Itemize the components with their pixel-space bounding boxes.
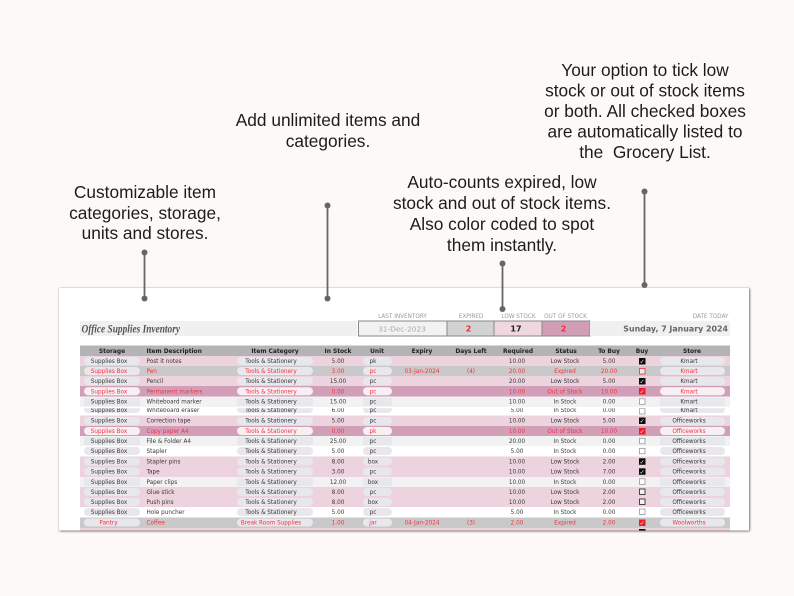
row: Whiteboard marker [80,396,730,407]
row: Whiteboard eraser: Whiteboard eraser [146,408,200,414]
row: Pencil: Pencil [146,379,164,385]
note: unlimited items: categories. [286,131,370,151]
row: Push pins: 10.00 [509,500,526,506]
note: tick options: the Grocery List. [579,142,711,162]
row: Stapler pins: Officeworks [672,460,706,466]
row: Tape: Low Stock [551,470,580,476]
row: Tape: pc [370,470,376,476]
note: auto-counts: them instantly. [447,235,557,255]
row: Coffee: Coffee [146,521,165,527]
row: Stapler: 0.00 [603,449,616,455]
row: Glue stick: Supplies Box [91,490,128,496]
row: Post it notes: Low Stock [551,359,580,365]
row: Hole puncher: 0.00 [603,510,616,516]
row: Stapler pins: box [368,460,379,466]
row: File & Folder A4: pc [370,439,376,445]
row: Tape: Tools & Stationery [244,470,297,476]
summary counters: LOW STOCK [501,314,536,320]
row: Pen: 20.00 [509,369,526,375]
row: Paper clips: Supplies Box [91,480,128,486]
row: Glue stick: Tools & Stationery [244,490,297,496]
row: Whiteboard marker: Kmart [680,400,698,406]
row: Stapler pins: 2.00 [603,460,616,466]
row: Stapler pins: Stapler pins [146,460,180,466]
row: Hole puncher: 5.00 [332,510,345,516]
row: Pencil: Kmart [680,379,698,385]
row: Permanent markers [80,386,730,396]
row: Hole puncher: pc [370,510,376,516]
row: Post it notes: pk [370,359,377,365]
row: Copy paper A4: Tools & Stationery [244,429,297,435]
table header: Storage [99,349,125,355]
row: Paper clips: Tools & Stationery [244,480,297,486]
row: Glue stick: 10.00 [509,490,526,496]
row: File & Folder A4: 0.00 [603,439,616,445]
row: Whiteboard eraser: In Stock [554,408,577,414]
table header [80,346,730,356]
row: Stapler: 5.00 [332,449,345,455]
row: Push pins: box [368,500,379,506]
row: Push pins: Officeworks [672,500,706,506]
row: File & Folder A4: Supplies Box [91,439,128,445]
row: Whiteboard marker: Tools & Stationery [244,400,297,406]
row: Stapler pins: 10.00 [509,460,526,466]
row: Post it notes: ✓ [640,358,645,366]
row: Tape: Tape [146,470,160,476]
row: Coffee: 1.00 [332,521,345,527]
row: Whiteboard eraser: Supplies Box [91,408,128,414]
table header: Item Category [251,349,299,355]
row: Tape [80,466,730,477]
row: Hole puncher: Supplies Box [91,510,128,516]
note: customizable categories [69,182,221,243]
row: File & Folder A4: 25.00 [330,439,347,445]
row: Stapler: Officeworks [672,449,706,455]
row: Whiteboard eraser: Tools & Stationery [244,408,297,414]
row: Pencil: 15.00 [330,379,347,385]
table header: Unit [370,349,384,355]
row: Whiteboard marker: pc [370,400,376,406]
connector: categories note [142,250,148,302]
table header: Expiry [412,349,433,355]
note: tick options [544,60,746,162]
date today: Sunday, 7 January 2024 [623,324,728,334]
date today [590,314,730,336]
row: Push pins: Supplies Box [91,500,128,506]
row: Tape: ✓ [640,469,645,476]
row: Post it notes [80,356,730,366]
note: customizable categories: Customizable item [74,182,216,202]
row: Post it notes: Kmart [680,359,698,365]
row: Pen: 03-Jan-2024 [405,369,440,375]
row: Paper clips: 0.00 [603,480,616,486]
row: File & Folder A4 [80,436,730,446]
note: unlimited items [236,110,420,151]
note: auto-counts: Also color coded to spot [410,214,594,234]
panel: spreadsheet screenshot [59,288,749,531]
row: Pen: 20.00 [601,369,618,375]
row: Post it notes: 5.00 [603,359,616,365]
row: Permanent markers: Out of Stock [547,389,583,395]
row: Stapler: 5.00 [511,449,524,455]
row: Correction tape: Low Stock [551,419,580,425]
row: Pencil: Tools & Stationery [244,379,297,385]
row: Pencil: Supplies Box [91,379,128,385]
row: File & Folder A4: Tools & Stationery [244,439,297,445]
note: auto-counts: stock and out of stock items. [393,193,611,213]
row: Permanent markers: Supplies Box [91,389,128,395]
row: Correction tape: 5.00 [603,419,616,425]
row: Glue stick: Officeworks [672,490,706,496]
row: Pen: Tools & Stationery [244,369,297,375]
row: Coffee: Pantry [99,521,118,527]
title bar: Office Supplies Inventory: Office Supplies Inventory [82,322,181,336]
row: Pen [80,366,730,376]
row: Tape: Officeworks [672,470,706,476]
row: Stapler pins: 8.00 [332,460,345,466]
row: Stapler pins [80,456,730,466]
row: Pencil: pc [370,379,376,385]
table header: Days Left [455,349,487,355]
row: Whiteboard marker: 15.00 [330,400,347,406]
row: Correction tape: Supplies Box [91,419,128,425]
row: Permanent markers: 10.00 [509,389,526,395]
row: Coffee: Expired [554,521,576,527]
note: customizable categories: units and stores. [82,223,208,243]
row: Stapler pins: Supplies Box [91,460,128,466]
note: tick options: stock or out of stock items [545,80,745,100]
row: Whiteboard marker: Supplies Box [91,400,128,406]
table header: Status [555,349,577,355]
note: tick options: Your option to tick low [561,60,729,80]
row: Pen: Supplies Box [91,369,128,375]
row: Whiteboard eraser: 5.00 [511,408,524,414]
row: Coffee: Break Room Supplies [241,521,301,527]
row: Correction tape: Tools & Stationery [244,419,297,425]
row: Copy paper A4: Supplies Box [91,429,128,435]
connector: unlimited items note [324,202,330,302]
row: Stapler [84,447,725,455]
row: Glue stick [80,487,730,497]
row: Glue stick: Low Stock [551,490,580,496]
row: Paper clips: 12.00 [330,480,347,486]
summary counters: 31-Dec-2023 [378,324,426,334]
row: Push pins: Tools & Stationery [244,500,297,506]
row: Post it notes: 10.00 [509,359,526,365]
row: Push pins: 2.00 [603,500,616,506]
row: Pen: Pen [146,369,157,375]
summary counters: OUT OF STOCK [544,314,587,320]
row: Stapler pins: Tools & Stationery [244,460,297,466]
summary counters: 17 [510,324,522,334]
row: Coffee [80,518,730,528]
row: Permanent markers: ✓ [640,388,645,396]
row: Stapler pins: Low Stock [551,460,580,466]
row: Whiteboard eraser: 0.00 [603,408,616,414]
row: Post it notes: Tools & Stationery [244,359,297,365]
table header: Item Description [146,349,202,355]
row: Correction tape: Correction tape [146,419,191,425]
table header: Store [683,349,701,355]
row: Paper clips: Paper clips [146,480,177,486]
row: Permanent markers: 10.00 [601,389,618,395]
row: File & Folder A4: Officeworks [672,439,706,445]
row: Stapler pins: ✓ [640,459,645,466]
row: Tape: Supplies Box [91,470,128,476]
row: Permanent markers: pc [370,389,376,395]
row: Stapler: Tools & Stationery [244,449,297,455]
note: auto-counts: Auto-counts expired, low [407,172,597,192]
row: Coffee: ✓ [640,520,645,527]
row: Whiteboard eraser [84,408,725,414]
row: Copy paper A4: 10.00 [509,429,526,435]
row: Correction tape: 10.00 [509,419,526,425]
row: Permanent markers: Tools & Stationery [244,389,297,395]
row: Correction tape: pc [370,419,376,425]
row: Pen: Expired [554,369,576,375]
row: Pencil: ✓ [640,378,645,386]
row: Copy paper A4 [80,426,730,436]
table header: In Stock [325,349,353,355]
row: File & Folder A4: File & Folder A4 [146,439,191,445]
row: Coffee: 04-Jan-2024 [405,521,440,527]
row: Post it notes: Supplies Box [91,359,128,365]
row: Push pins: Push pins [146,500,174,506]
note: auto-counts [393,172,611,255]
row: Paper clips: In Stock [554,480,577,486]
row: Stapler: Stapler [146,449,168,455]
row: Copy paper A4: ✓ [640,428,645,436]
row: Whiteboard eraser: 6.00 [332,408,345,414]
row: next row, cut off [80,528,730,530]
row: Correction tape [80,416,730,426]
note: customizable categories: categories, storage, [69,203,221,223]
row: Whiteboard marker: 10.00 [509,400,526,406]
row: Stapler: In Stock [554,449,577,455]
summary counters [358,314,590,336]
row: Copy paper A4: pk [370,429,377,435]
row: Whiteboard eraser: Kmart [680,408,698,414]
row: Copy paper A4: Out of Stock [547,429,583,435]
row: Glue stick: pc [370,490,376,496]
row: Paper clips [80,477,730,487]
row: Push pins: Low Stock [551,500,580,506]
row: File & Folder A4: 20.00 [509,439,526,445]
row: Pen: Kmart [680,369,698,375]
row: Pen: (4) [467,369,475,375]
row: Whiteboard marker: 0.00 [603,400,616,406]
row: File & Folder A4: In Stock [554,439,577,445]
row: Hole puncher [84,508,725,516]
row: Copy paper A4: 10.00 [601,429,618,435]
summary counters: LAST INVENTORY [378,314,427,320]
row: Glue stick: 8.00 [332,490,345,496]
row: Whiteboard marker: Whiteboard marker [146,400,202,406]
row: Hole puncher: Hole puncher [146,510,185,516]
row: Glue stick: 2.00 [603,490,616,496]
row: Hole puncher: Tools & Stationery [244,510,297,516]
row: Pencil: Low Stock [551,379,580,385]
row: Stapler: pc [370,449,376,455]
row: Coffee: 2.00 [603,521,616,527]
table header: Buy [636,349,648,355]
row: Tape: 3.00 [332,470,345,476]
row: Whiteboard marker: In Stock [554,400,577,406]
row: Stapler: Supplies Box [91,449,128,455]
row: Tape: 7.00 [603,470,616,476]
row: Coffee: Woolworths [672,521,706,527]
row: Push pins [80,497,730,507]
row: Post it notes: Post it notes [146,359,182,365]
row: Copy paper A4: Copy paper A4 [146,429,189,435]
table header: To Buy [598,349,620,355]
row: Post it notes: 5.00 [332,359,345,365]
row: Correction tape: ✓ [640,418,645,425]
row: Coffee: (3) [467,521,475,527]
row: Pencil: 20.00 [509,379,526,385]
note: tick options: are automatically listed to [548,122,742,142]
row: Paper clips: 10.00 [509,480,526,486]
row: Correction tape: 5.00 [332,419,345,425]
row: Tape: 10.00 [509,470,526,476]
connector: tick boxes note [642,188,648,288]
row: Copy paper A4: Officeworks [672,429,706,435]
row: Whiteboard eraser: pc [370,408,376,414]
row: Permanent markers: Permanent markers [146,389,203,395]
row: Hole puncher: 5.00 [511,510,524,516]
row: Paper clips: box [368,480,379,486]
row: Copy paper A4: 0.00 [332,429,345,435]
summary counters: 2 [466,324,471,334]
table header: Required [503,349,533,355]
row: Permanent markers: 0.00 [332,389,345,395]
row: Hole puncher: In Stock [554,510,577,516]
note: tick options: or both. All checked boxes [544,101,746,121]
row: Pencil [80,376,730,386]
row: Pen: 3.00 [332,369,345,375]
row: Paper clips: Officeworks [672,480,706,486]
row: Permanent markers: Kmart [680,389,698,395]
connector: auto-counts note [500,260,506,312]
summary counters: 2 [561,324,566,334]
summary counters: EXPIRED [459,314,484,320]
row: Push pins: 8.00 [332,500,345,506]
row: Hole puncher: Officeworks [672,510,706,516]
date today: DATE TODAY [693,314,729,320]
note: unlimited items: Add unlimited items and [236,110,420,130]
row: Pen: pc [370,369,376,375]
row: Pencil: 5.00 [603,379,616,385]
row: Correction tape: Officeworks [672,419,706,425]
row: Coffee: 2.00 [511,521,524,527]
row: Glue stick: Glue stick [146,490,175,496]
title bar: Office Supplies Inventory [80,321,357,336]
row: Coffee: jar [368,521,377,527]
